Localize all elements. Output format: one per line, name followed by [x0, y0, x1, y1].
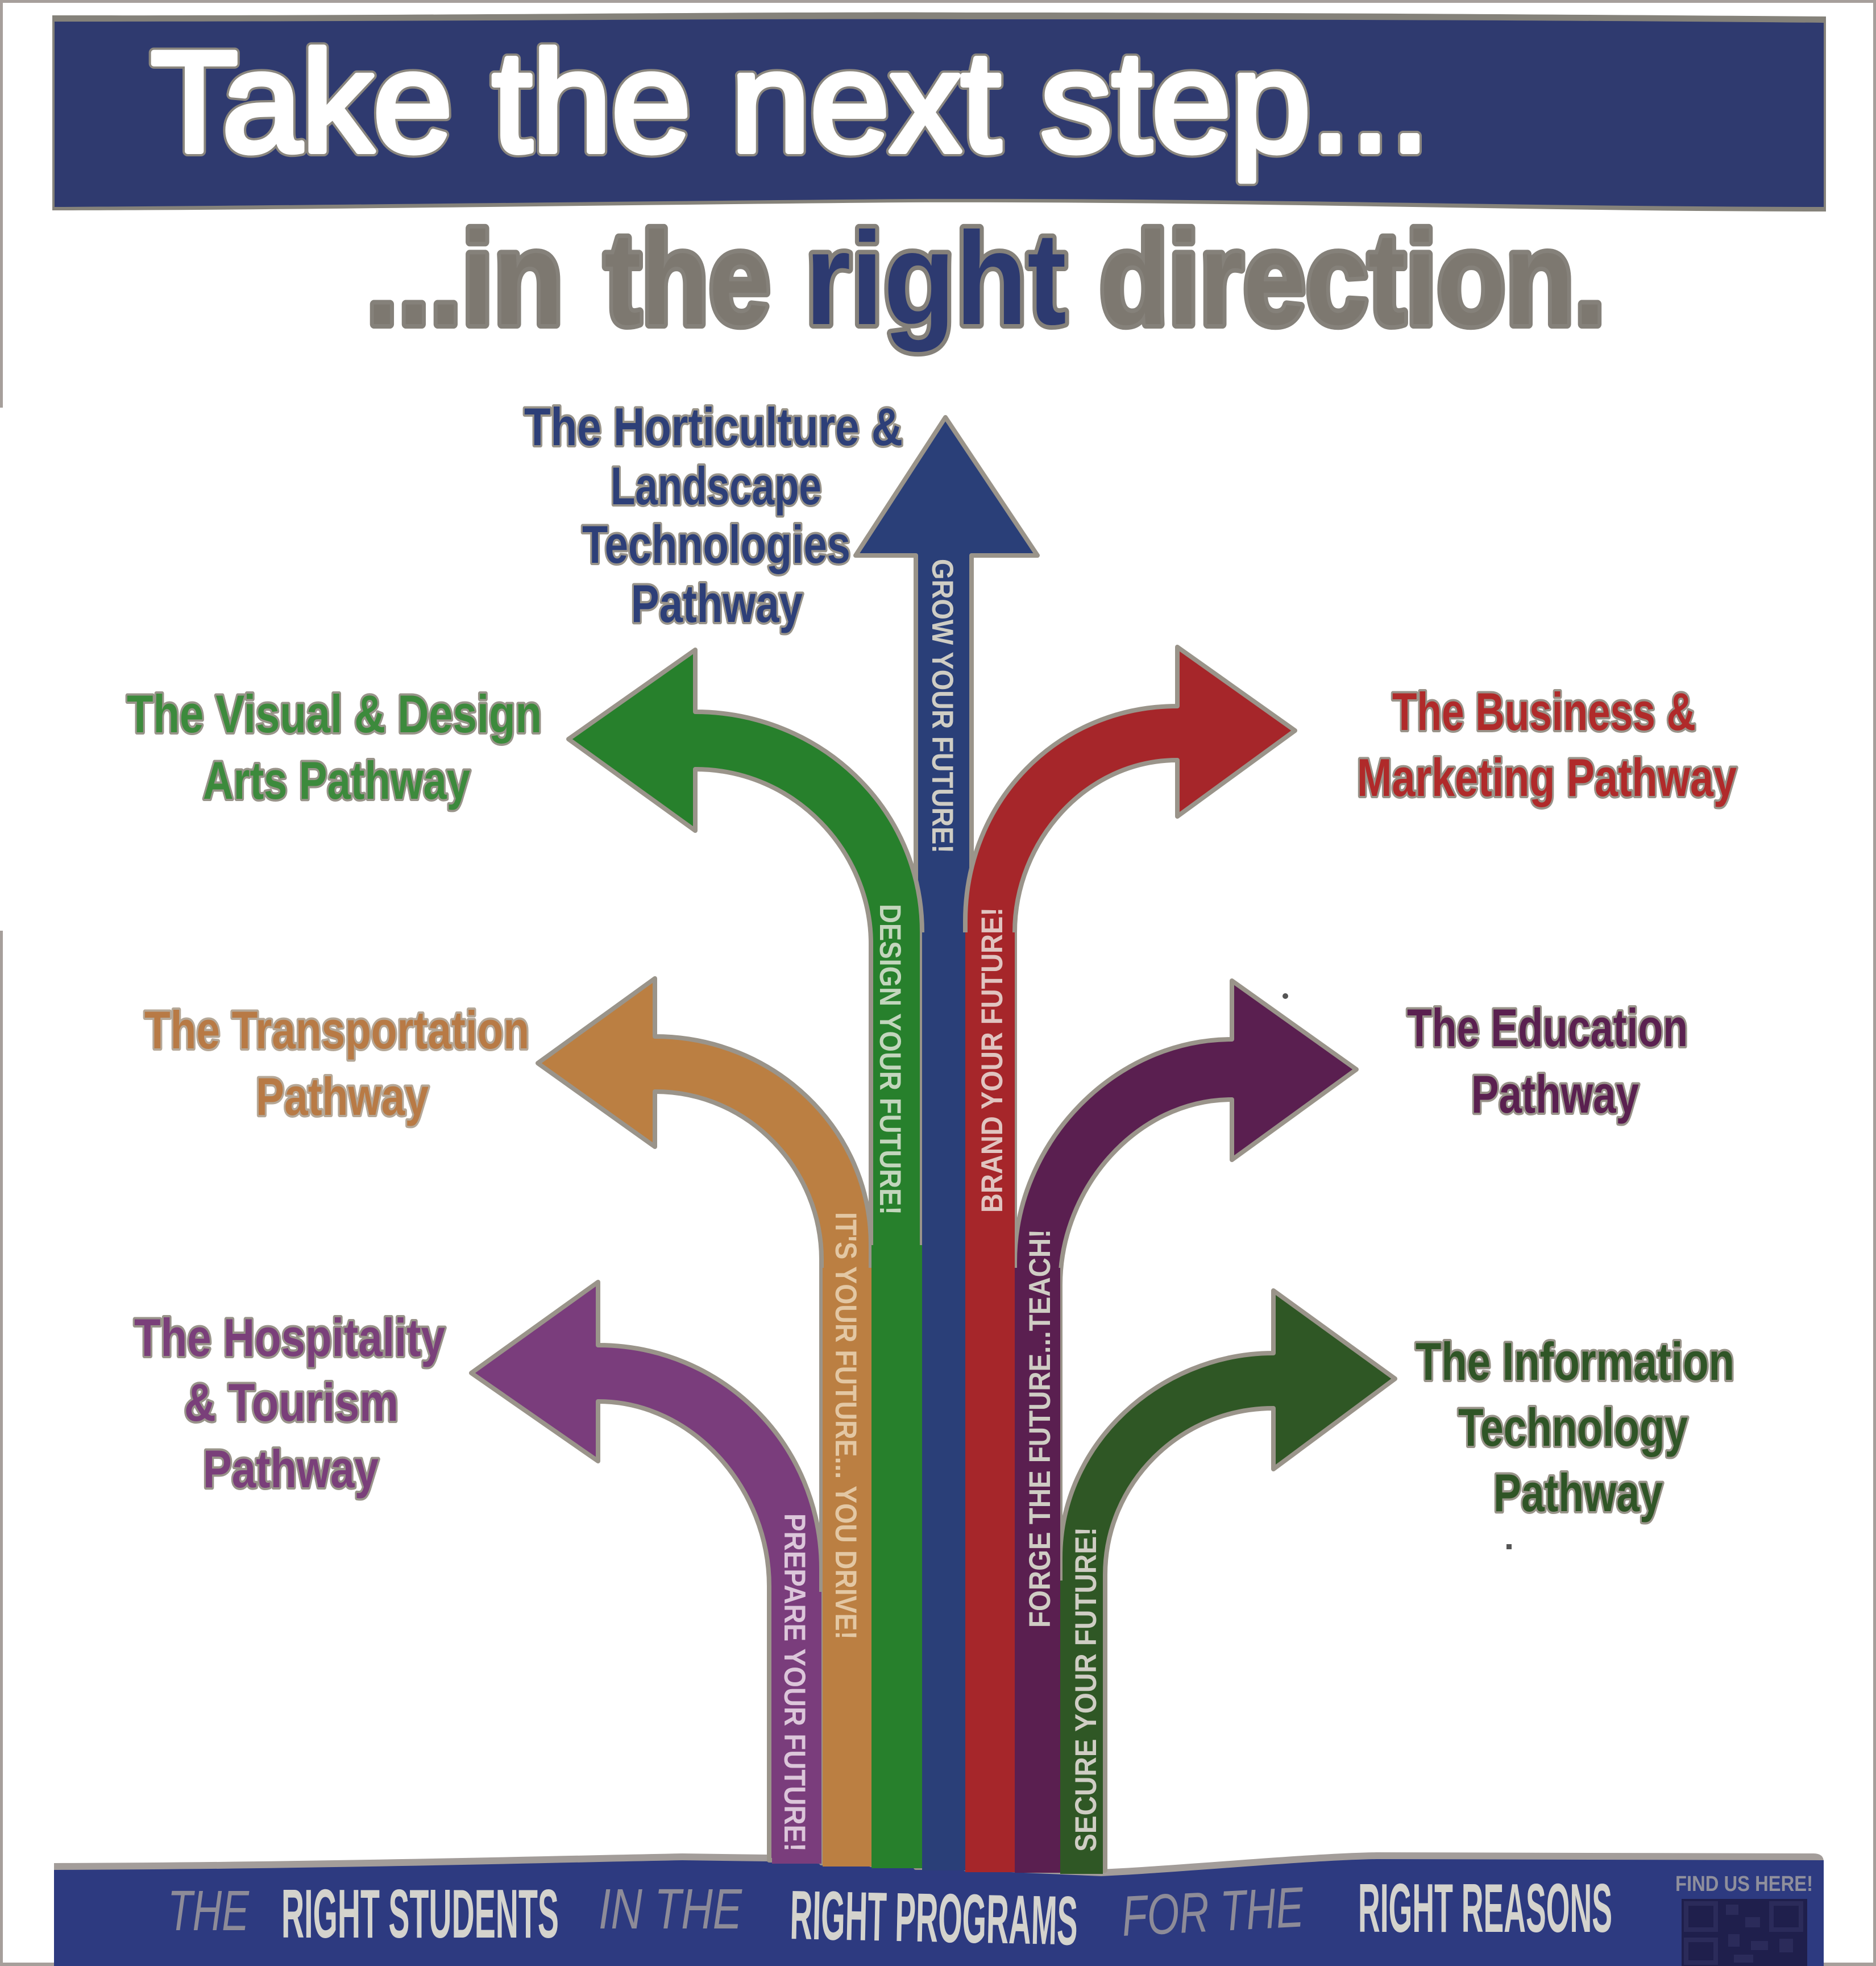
arrow text: prepare your future: PREPARE YOUR FUTURE! [778, 1513, 811, 1852]
label: transportation pathway: The Transportation [144, 1000, 529, 1060]
merged colour bands [772, 932, 1103, 1874]
subtitle: ...in [366, 205, 563, 352]
arrow: blue horticulture [856, 417, 1037, 1868]
label: transportation pathway: Pathway [256, 1067, 429, 1126]
arrow text: grow your future: GROW YOUR FUTURE! [925, 559, 959, 853]
label: business and marketing pathway: Marketing Pathway [1357, 748, 1737, 807]
label: information technology pathway: The Information [1416, 1332, 1734, 1391]
label: information technology pathway [1416, 1332, 1734, 1523]
label: education pathway [1407, 998, 1688, 1124]
label: horticulture pathway: The Horticulture & [524, 397, 903, 457]
subtitle: the [604, 205, 770, 352]
label: horticulture pathway: Pathway [631, 574, 803, 633]
label: information technology pathway: Technology [1458, 1397, 1688, 1457]
label: transportation pathway [144, 1000, 529, 1126]
footer banner: RIGHT PROGRAMS [789, 1876, 1078, 1960]
subtitle: direction. [1099, 205, 1605, 352]
footer: FOR THE: FOR THE [1120, 1875, 1306, 1948]
arrow: orange transportation [538, 978, 871, 1863]
label: hospitality and tourism pathway: & Tourism [184, 1372, 399, 1432]
label: hospitality and tourism pathway: Pathway [203, 1439, 379, 1499]
footer: find us label: FIND US HERE! [1675, 1872, 1813, 1896]
subtitle [366, 205, 1605, 352]
arrow: dark green information technology [1060, 1291, 1395, 1870]
label: business and marketing pathway [1357, 682, 1737, 807]
label: visual and design pathway [127, 684, 542, 810]
label: education pathway: The Education [1407, 998, 1688, 1057]
title text: Take the next step... [151, 22, 1430, 182]
footer: IN THE: IN THE [599, 1877, 742, 1941]
arrow text: brand your future: BRAND YOUR FUTURE! [976, 907, 1009, 1213]
arrow: red business and marketing [965, 647, 1295, 1869]
label: visual and design pathway: The Visual & Design [127, 684, 542, 744]
label: visual and design pathway: Arts Pathway [203, 750, 470, 810]
arrow text: secure your future: SECURE YOUR FUTURE! [1069, 1527, 1103, 1852]
arrow text: design your future: DESIGN YOUR FUTURE! [873, 904, 907, 1215]
label: education pathway: Pathway [1471, 1064, 1639, 1124]
icon: QR code [1682, 1899, 1807, 1966]
label: hospitality and tourism pathway: The Hospitality [134, 1308, 445, 1367]
arrow: purple education [1015, 981, 1356, 1869]
title banner [52, 13, 1826, 211]
label: horticulture pathway: Technologies [582, 515, 850, 574]
arrow text: it's your future you drive: IT'S YOUR FUTURE... YOU DRIVE! [829, 1212, 862, 1640]
label: hospitality and tourism pathway [134, 1308, 445, 1499]
label: information technology pathway: Pathway [1493, 1463, 1663, 1523]
arrow: green visual and design [568, 650, 922, 1865]
footer banner [54, 1852, 1824, 1966]
subtitle: right [805, 205, 1066, 352]
arrow: violet hospitality [471, 1282, 821, 1860]
label: horticulture pathway [524, 397, 903, 633]
label: horticulture pathway: Landscape [611, 456, 821, 516]
footer: THE: THE [168, 1879, 250, 1943]
arrow text: forge the future teach: FORGE THE FUTURE...TEACH! [1023, 1229, 1057, 1628]
label: business and marketing pathway: The Business & [1392, 682, 1696, 741]
title text: Take the next step... [151, 22, 1430, 182]
footer banner: RIGHT STUDENTS [281, 1875, 559, 1952]
